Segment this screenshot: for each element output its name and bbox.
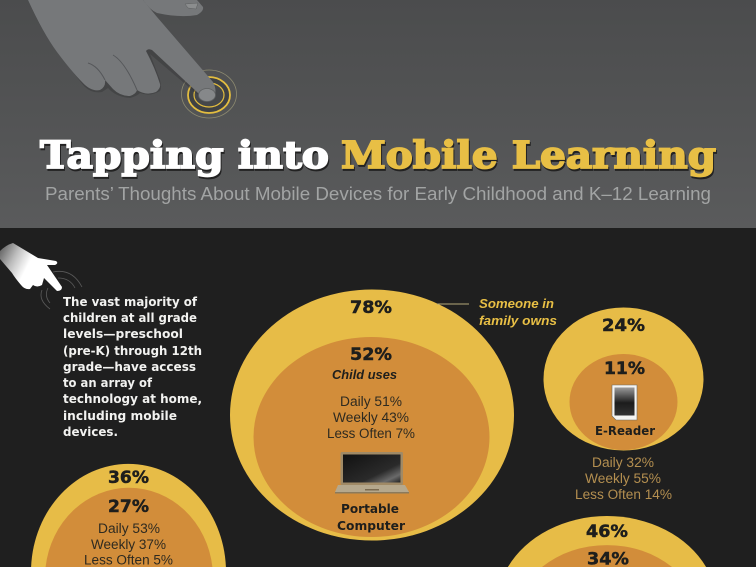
- panel: portable computer bubble: 78%: [350, 298, 392, 318]
- text block: e-reader frequency: Weekly 55%: [585, 471, 661, 486]
- panel: bottom-left bubble: Weekly 37%: [91, 537, 166, 552]
- text block: intro: devices.: [63, 424, 118, 439]
- text block: e-reader frequency: Less Often 14%: [575, 487, 672, 502]
- panel: portable computer bubble: [230, 290, 514, 540]
- subtitle: Parents’ Thoughts About Mobile Devices for Early Childhood and K–12 Learning: [45, 184, 711, 204]
- panel: e-reader bubble: 11%: [604, 359, 645, 379]
- text block: intro: to an array of: [63, 375, 153, 390]
- title: [40, 133, 717, 179]
- text block: e-reader frequency: Daily 32%: [592, 455, 654, 470]
- title: Tapping into: [41, 135, 330, 179]
- main dark panel: [0, 228, 756, 567]
- panel: portable computer bubble: Computer: [337, 519, 405, 533]
- icon: laptop: [335, 452, 409, 494]
- panel: portable computer bubble: Portable: [341, 502, 399, 516]
- panel: portable computer bubble: Daily 51%: [340, 394, 402, 409]
- panel: bottom-right bubble: 46%: [586, 522, 628, 542]
- text block: intro: grade—have access: [63, 359, 196, 374]
- panel: e-reader bubble: 24%: [602, 316, 645, 336]
- panel: bottom-right bubble: [508, 516, 706, 567]
- title: Tapping into: [40, 133, 329, 177]
- panel: bottom-left bubble: 36%: [108, 468, 149, 488]
- text block: intro: children at all grade: [63, 310, 197, 325]
- callout: someone in family owns: [437, 296, 557, 328]
- callout: someone in family owns: family owns: [479, 313, 557, 328]
- panel: portable computer bubble: Less Often 7%: [327, 426, 415, 441]
- title: Mobile Learning: [341, 133, 716, 177]
- text block: intro: (pre-K) through 12th: [63, 343, 202, 358]
- title: Mobile Learning: [342, 135, 717, 179]
- panel: e-reader bubble: [544, 308, 704, 450]
- text block: e-reader frequency: [575, 455, 672, 502]
- panel: portable computer bubble: Weekly 43%: [333, 410, 409, 425]
- panel: bottom-left bubble: [31, 464, 226, 567]
- text block: intro: technology at home,: [63, 391, 202, 406]
- panel: portable computer bubble: 52%: [350, 345, 392, 365]
- panel: e-reader bubble: E-Reader: [595, 424, 655, 438]
- text block: intro: [63, 294, 202, 439]
- panel: bottom-left bubble: Daily 53%: [98, 521, 160, 536]
- callout: someone in family owns: Someone in: [479, 296, 554, 311]
- header band: [0, 0, 756, 228]
- icon: large hand tapping: [28, 0, 236, 118]
- panel: bottom-left bubble: 27%: [108, 497, 149, 517]
- icon: small white hand: [0, 243, 82, 309]
- text block: intro: including mobile: [63, 408, 177, 423]
- text block: intro: levels—preschool: [63, 326, 183, 341]
- panel: portable computer bubble: Child uses: [332, 367, 397, 382]
- text block: intro: The vast majority of: [63, 294, 198, 309]
- icon: e-reader: [612, 385, 637, 420]
